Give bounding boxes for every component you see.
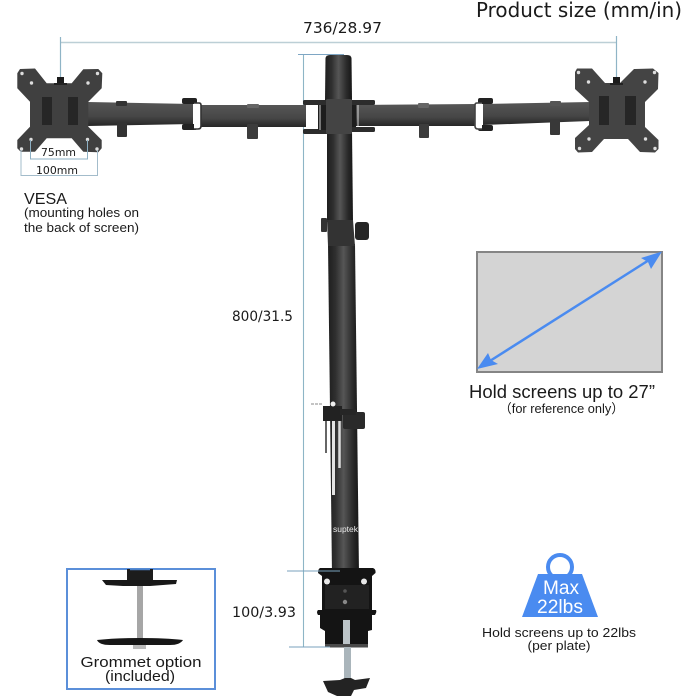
VESA dimension lines: 75mm bbox=[41, 147, 76, 159]
VESA caption: VESA bbox=[24, 191, 67, 208]
width dimension: 736/28.97 bbox=[303, 19, 382, 37]
screen size caption: （for reference only） bbox=[499, 401, 624, 416]
VESA caption: the back of screen) bbox=[24, 220, 139, 235]
screen size caption: Hold screens up to 27” bbox=[469, 381, 655, 402]
icon: weight max 22lbs bbox=[522, 555, 598, 618]
central pole bbox=[325, 55, 359, 575]
VESA dimension lines bbox=[21, 140, 98, 177]
panel: screen size bbox=[477, 252, 662, 372]
weight caption: Hold screens up to 22lbs bbox=[482, 625, 637, 640]
weight caption bbox=[482, 625, 637, 653]
VESA caption: (mounting holes on bbox=[24, 205, 139, 220]
right monitor arm bbox=[356, 98, 590, 138]
weight caption: (per plate) bbox=[528, 638, 590, 653]
height dimension 100: 100/3.93 bbox=[232, 605, 296, 621]
height dimension 800: 800/31.5 bbox=[232, 309, 293, 325]
icon: weight max 22lbs: Max bbox=[543, 578, 579, 599]
width dimension bbox=[60, 19, 616, 78]
icon: weight max 22lbs: 22lbs bbox=[537, 597, 583, 618]
arm hinge at pole bbox=[303, 99, 375, 134]
panel: grommet option: (included) bbox=[105, 669, 175, 685]
left VESA plate bbox=[17, 68, 102, 152]
height dimension 100 bbox=[232, 571, 340, 647]
upper height knob bbox=[321, 218, 369, 240]
desk clamp bbox=[317, 568, 376, 696]
screen size caption bbox=[469, 381, 655, 416]
brand on pole: suptek bbox=[333, 525, 359, 534]
VESA dimension lines: 100mm bbox=[36, 165, 78, 177]
cable clip bbox=[311, 402, 365, 495]
panel: grommet option: Grommet option bbox=[80, 655, 202, 671]
VESA caption bbox=[24, 191, 139, 235]
left monitor arm bbox=[88, 98, 306, 139]
right VESA plate bbox=[575, 68, 658, 152]
panel: grommet option bbox=[67, 569, 215, 689]
